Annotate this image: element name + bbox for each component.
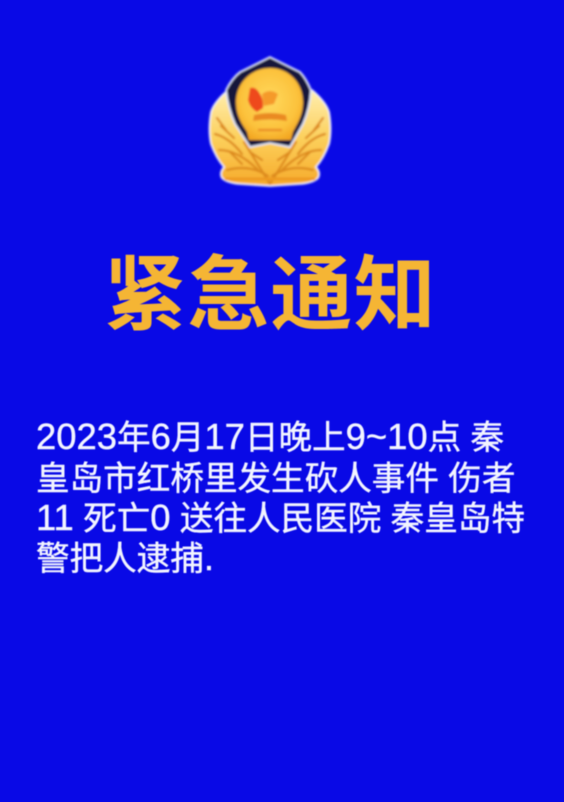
wreath — [210, 90, 330, 186]
body text: 11 死亡0 送往人民医院 秦皇岛特 — [36, 497, 525, 538]
title: 紧急通知 — [104, 250, 437, 341]
shield — [226, 57, 311, 147]
body text: 2023年6月17日晚上9~10点 秦 — [36, 416, 504, 457]
red field — [248, 88, 263, 112]
body text: 皇岛市红桥里发生砍人事件 伤者 — [36, 461, 515, 498]
body text — [36, 416, 525, 578]
wreath leaf strokes — [215, 118, 325, 184]
central disc — [236, 68, 303, 140]
icon: police emblem — [206, 54, 334, 188]
gate — [253, 113, 287, 121]
body text: 警把人逮捕. — [36, 537, 214, 578]
